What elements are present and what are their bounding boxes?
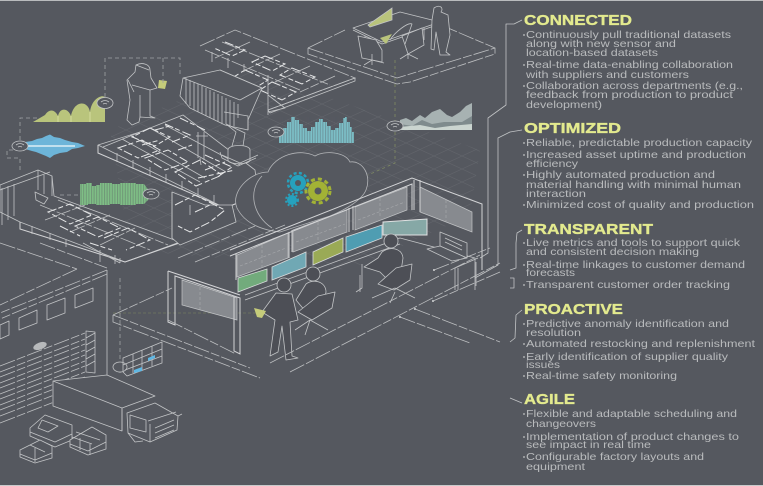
section: proactive: PROACTIVE [524,301,623,318]
section: optimized: Minimized cost of quality and production [526,199,754,211]
section: transparent: forecasts [526,267,575,279]
section: optimized: OPTIMIZED [524,120,621,137]
section: agile: Configurable factory layouts and [526,451,704,463]
storage rack [123,342,162,376]
delivery truck [53,375,182,442]
robot arm [196,124,258,166]
factory floor outline [113,248,500,378]
door hatching [86,331,95,373]
section: optimized: Increased asset uptime and production [526,149,746,161]
section: connected: location-based datasets [526,47,658,59]
lower left conveyor [0,170,236,264]
dashed sensor links [7,58,395,376]
pallets of goods [20,415,106,463]
section: agile: see impact in real time [526,439,651,451]
section: connected: along with new sensor and [526,38,676,50]
bottom edge [0,485,763,486]
section: transparent: and consistent decision making [526,246,699,258]
section: proactive: Real-time safety monitoring [526,370,677,382]
chart: blue waveform [25,134,85,158]
section: connected: Collaboration across departments (e.g., [526,80,743,92]
top edge [0,0,763,1]
isometric floor grid [110,70,480,270]
section: transparent: Real-time linkages to customer demand [526,259,745,271]
section: transparent: Live metrics and tools to support quick [526,237,741,249]
building [0,243,107,423]
chart: teal bars [279,117,354,143]
chart: grey stacked area [400,103,472,130]
second seated operator [295,267,335,335]
left chair [358,36,382,62]
section: proactive: Predictive anomaly identification and [526,318,729,330]
section: connected: Real-time data-enabling collaboration [526,59,733,71]
worker with tablet [127,64,167,125]
wall frame [230,178,482,280]
wifi sensor icons [12,98,403,372]
middle conveyor [98,115,258,208]
section: proactive [523,301,755,382]
section: optimized [523,120,754,211]
section: optimized: interaction [526,188,586,200]
roller door [0,333,85,423]
standing manager [431,6,450,55]
section: connected: feedback from production to product [526,89,733,101]
section: optimized: material handling with minimal human [526,179,741,191]
connector lines to text [475,20,522,403]
section: connected: Continuously pull traditional datasets [526,29,731,41]
desk [245,238,478,300]
cloud [236,153,368,232]
section: proactive: Early identification of supplier quality [526,351,729,363]
icon: gears [286,173,330,206]
building logo [32,340,48,352]
section: optimized: Highly automated production and [526,169,715,181]
building windows [0,288,93,339]
wall panels [182,187,472,320]
section: optimized: efficiency [526,158,579,170]
floor dots [399,269,435,318]
section: optimized: Reliable, predictable production capacity [526,137,753,149]
section: proactive: issues [526,359,560,371]
chart: green bars [80,183,150,205]
section: agile: changeovers [526,418,596,430]
seated operator [356,234,415,303]
section: agile: Implementation of product changes to [526,431,739,443]
factory illustration [0,6,522,463]
upper conveyor [200,30,355,115]
chart: lime area [33,96,105,122]
section: agile [523,391,739,473]
control room [168,178,482,360]
monitors [238,219,427,292]
section: connected: CONNECTED [524,12,632,29]
production machine [180,70,262,130]
text panel [523,12,755,473]
right chair [402,28,424,54]
section: agile: Flexible and adaptable scheduling and [526,408,737,420]
standing supervisor [254,278,298,360]
section: agile: AGILE [524,391,575,408]
section: transparent: TRANSPARENT [524,221,653,238]
executive platform [308,28,495,84]
section: connected: with suppliers and customers [525,69,689,81]
section: agile: equipment [526,461,585,473]
section: connected: development) [526,99,602,111]
section: proactive: Automated restocking and replenishment [526,338,755,350]
section: proactive: resolution [526,327,581,339]
laptop [427,232,467,261]
section: transparent [523,221,745,291]
office desk with staff [353,6,450,65]
section: transparent: Transparent customer order tracking [526,279,730,291]
section: connected [523,12,743,111]
